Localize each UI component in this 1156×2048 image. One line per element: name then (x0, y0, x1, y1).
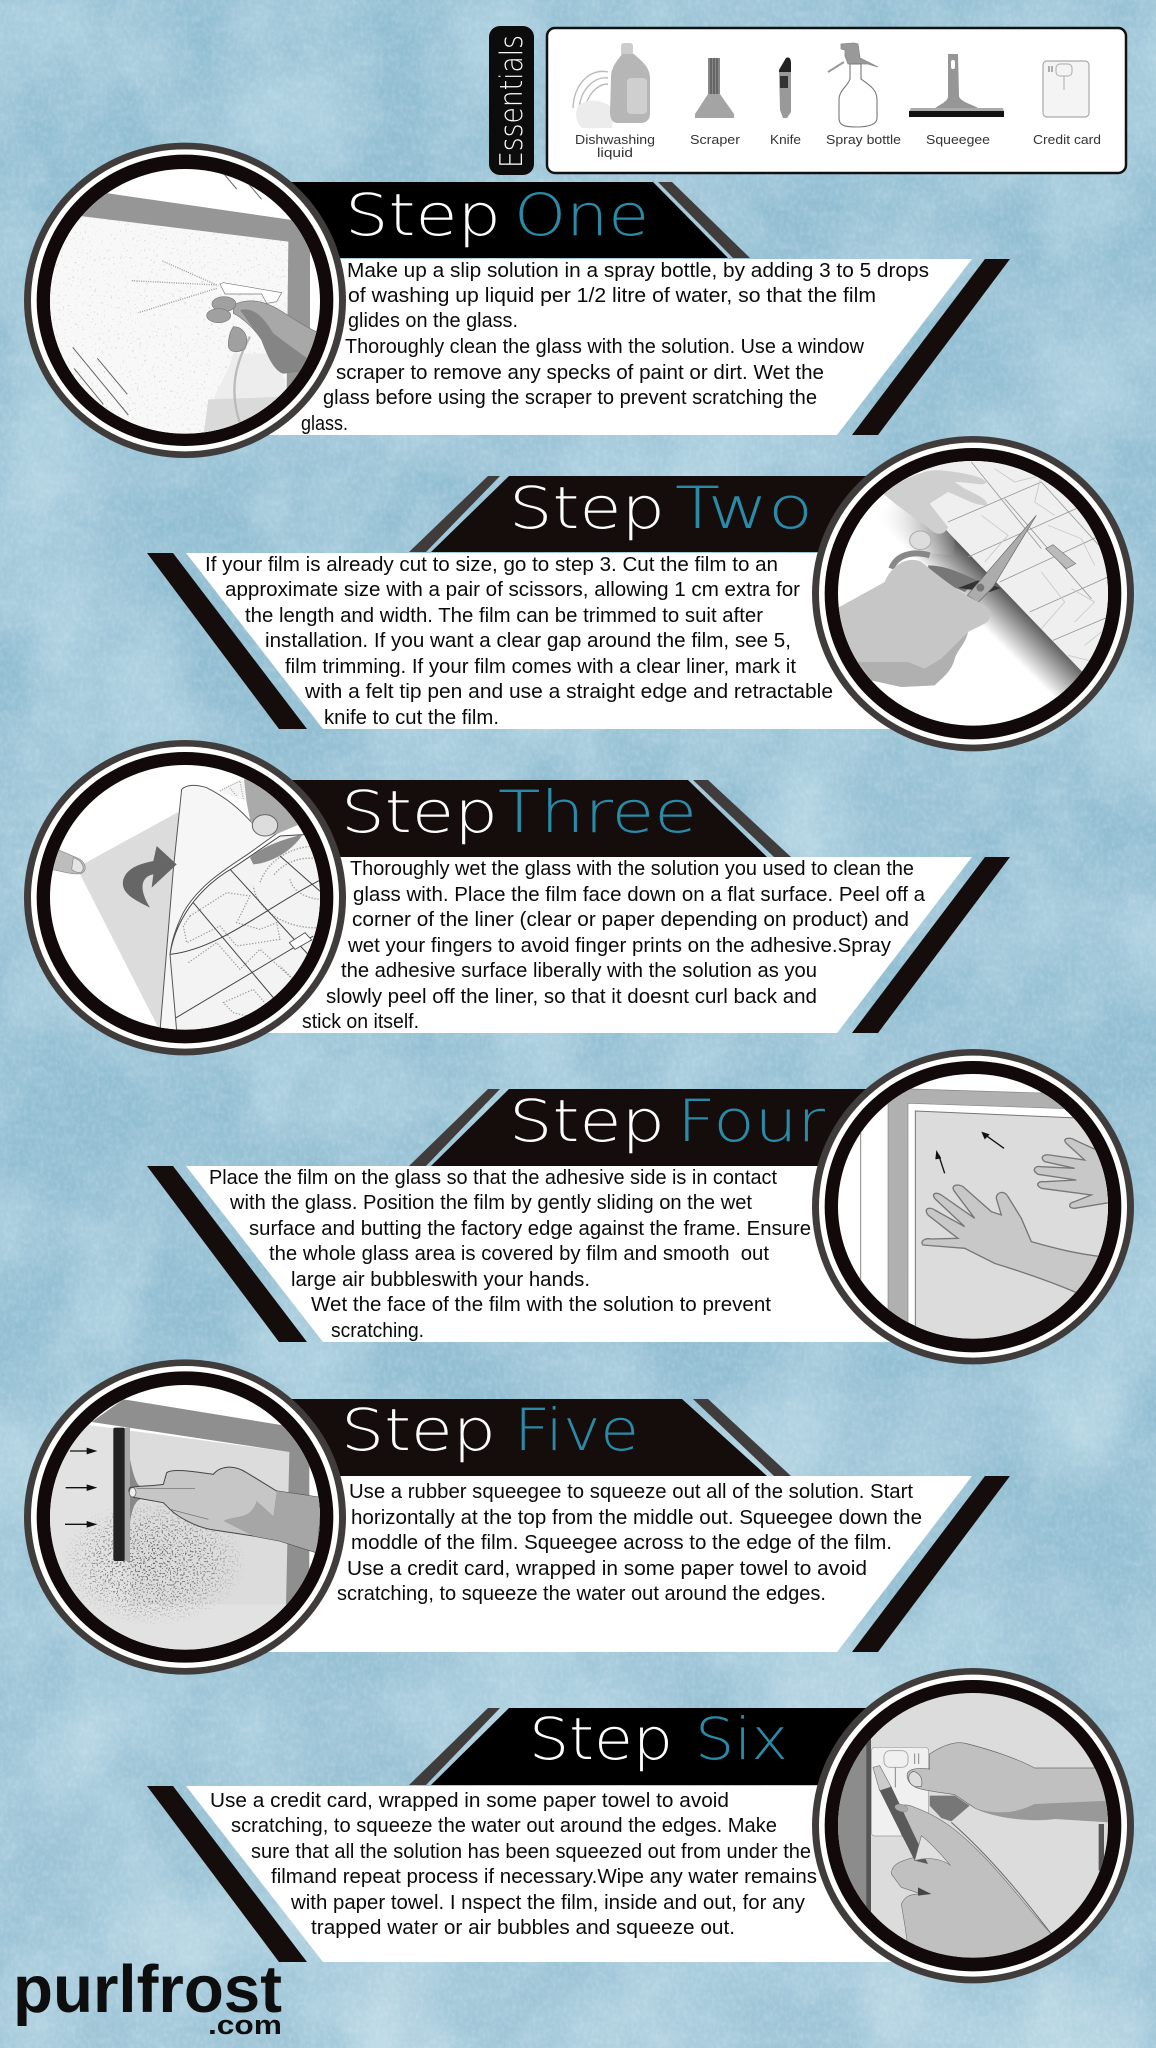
text block: step one: of washing up liquid per 1/2 litre of water, so that the film (348, 284, 876, 307)
icon: scraper (690, 58, 740, 147)
illustration: cutting film with scissors (812, 436, 1134, 751)
illustration: peeling the liner (24, 740, 346, 1055)
text block: step three: wet your fingers to avoid finger prints on the adhesive.Spray (347, 934, 892, 957)
text block: step six: with paper towel. I nspect the film, inside and out, for any (290, 1891, 806, 1914)
heading: step two (409, 474, 900, 552)
icon: dishwashing liquid (573, 43, 655, 160)
panel: step six (147, 1668, 1134, 1983)
logo: purlfrost.com: purlfrost (13, 1952, 282, 2027)
icon: squeegee: Squeegee (926, 133, 990, 147)
icon: credit card (1033, 61, 1101, 147)
heading: step six (409, 1705, 900, 1785)
heading: step two: Step (509, 474, 665, 542)
icon: knife (770, 57, 801, 147)
icon: dishwashing liquid: Dishwashing (575, 133, 655, 147)
text block: step one: scraper to remove any specks of paint or dirt. Wet the (336, 361, 824, 384)
panel: step three (24, 740, 1010, 1055)
panel: essentials (489, 26, 1126, 175)
icon: scraper: Scraper (690, 133, 740, 147)
text block: step six (147, 1786, 900, 1962)
heading: step four (409, 1087, 900, 1166)
panel: step two (147, 436, 1134, 751)
illustration: spraying the window (24, 143, 346, 458)
text block: step five: Use a credit card, wrapped in some paper towel to avoid (347, 1557, 867, 1580)
heading: step four: Four (677, 1087, 825, 1155)
heading: step three: Three (498, 778, 697, 846)
heading: step three: Step (341, 778, 498, 846)
text block: step six: Use a credit card, wrapped in some paper towel to avoid (210, 1789, 729, 1812)
heading: step five: Five (514, 1396, 639, 1464)
text block: step two: with a felt tip pen and use a straight edge and retractable (304, 680, 833, 703)
panel: step four (147, 1049, 1134, 1364)
heading: step one (250, 181, 750, 258)
heading: step three (250, 778, 791, 857)
text block: step three: glass with. Place the film face down on a flat surface. Peel off a (353, 883, 926, 906)
text block: step three: stick on itself. (302, 1010, 419, 1033)
text block: step four (147, 1166, 900, 1342)
illustration: hands positioning film (812, 1049, 1134, 1364)
heading: step six: Step (529, 1705, 673, 1773)
icon: dishwashing liquid: liquid (597, 146, 633, 160)
text block: step one: glass before using the scraper to prevent scratching the (323, 386, 817, 409)
text block: step five: Use a rubber squeegee to squeeze out all of the solution. Start (349, 1480, 913, 1503)
text block: step five: moddle of the film. Squeegee across to the edge of the film. (351, 1531, 892, 1554)
illustration: credit card and knife trimming (812, 1668, 1134, 1983)
tools box (547, 28, 1126, 173)
text block: step six: scratching, to squeeze the water out around the edges. Make (231, 1814, 777, 1837)
heading: step five (250, 1396, 791, 1476)
icon: spray bottle: Spray bottle (826, 133, 901, 147)
text block: step one (250, 259, 1010, 435)
icon: credit card: Credit card (1033, 133, 1101, 147)
text block: step two: If your film is already cut to size, go to step 3. Cut the film to an (205, 553, 778, 576)
heading: step one: One (514, 181, 649, 249)
essentials vertical label: Essentials (494, 35, 530, 168)
heading: step four: Step (509, 1087, 665, 1155)
text block: step two (147, 553, 900, 729)
heading: step five: Step (341, 1396, 496, 1464)
illustration: squeegee on film (24, 1359, 346, 1675)
text block: step one: Make up a slip solution in a spray bottle, by adding 3 to 5 drops (347, 259, 929, 282)
text block: step two: approximate size with a pair of scissors, allowing 1 cm extra for (225, 578, 800, 601)
text block: step four: the whole glass area is covered by film and smooth out (269, 1242, 769, 1265)
icon: squeegee (909, 54, 1004, 147)
text block: step four: Wet the face of the film with the solution to prevent (311, 1293, 771, 1316)
text block: step five: horizontally at the top from the middle out. Squeegee down the (351, 1506, 922, 1529)
text block: step five: scratching, to squeeze the water out around the edges. (337, 1582, 826, 1605)
text block: step six: sure that all the solution has been squeezed out from under the (251, 1840, 811, 1863)
panel: step one (24, 143, 1010, 458)
text block: step four: Place the film on the glass so that the adhesive side is in contact (209, 1166, 777, 1189)
text block: step two: film trimming. If your film comes with a clear liner, mark it (285, 655, 796, 678)
text block: step two: installation. If you want a clear gap around the film, see 5, (265, 629, 791, 652)
heading: step one: Step (345, 181, 501, 249)
icon: spray bottle (826, 43, 901, 147)
text block: step four: scratching. (331, 1319, 424, 1342)
text block: step one: Thoroughly clean the glass with the solution. Use a window (345, 335, 864, 358)
panel: step five (24, 1359, 1010, 1675)
text block: step one: glides on the glass. (348, 309, 518, 332)
text block: step four: with the glass. Position the film by gently sliding on the wet (229, 1191, 752, 1214)
text block: step two: knife to cut the film. (324, 706, 499, 729)
text block: step four: surface and butting the factory edge against the frame. Ensure (249, 1217, 811, 1240)
text block: step three: the adhesive surface liberally with the solution as you (341, 959, 817, 982)
text block: step three (250, 857, 1010, 1033)
text block: step six: filmand repeat process if necessary.Wipe any water remains (271, 1865, 817, 1888)
text block: step six: trapped water or air bubbles and squeeze out. (311, 1916, 735, 1939)
icon: knife: Knife (770, 133, 801, 147)
text block: step three: slowly peel off the liner, so that it doesnt curl back and (326, 985, 817, 1008)
text block: step three: corner of the liner (clear or paper depending on product) and (352, 908, 909, 931)
text block: step one: glass. (301, 412, 348, 435)
text block: step two: the length and width. The film can be trimmed to suit after (245, 604, 763, 627)
logo: purlfrost.com: .com (208, 2010, 282, 2040)
text block: step three: Thoroughly wet the glass with the solution you used to clean the (350, 857, 914, 880)
heading: step two: Two (675, 474, 813, 542)
text block: step five (250, 1476, 1010, 1652)
text block: step four: large air bubbleswith your hands. (291, 1268, 590, 1291)
heading: step six: Six (695, 1705, 788, 1773)
